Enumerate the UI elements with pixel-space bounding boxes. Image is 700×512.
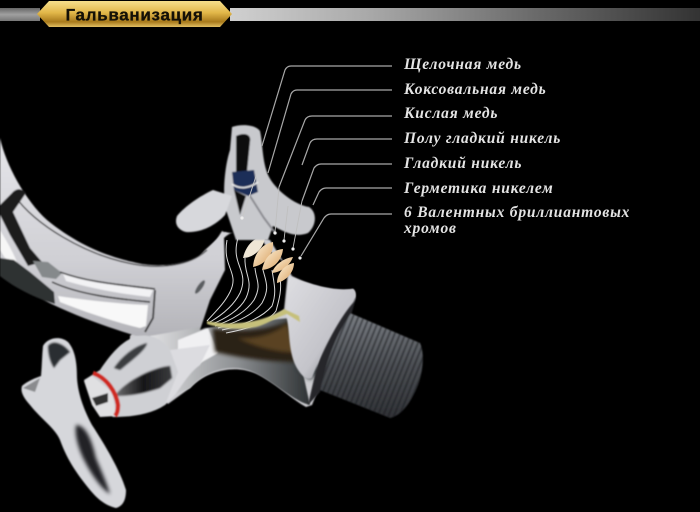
layer labels: Коксовальная медь bbox=[403, 81, 546, 98]
header badge bbox=[37, 1, 232, 27]
layer labels: Гладкий никель bbox=[403, 155, 522, 172]
cutaway layers bbox=[200, 230, 300, 333]
upper handle bbox=[176, 125, 315, 240]
main body silhouette bbox=[130, 232, 356, 407]
faucet illustration bbox=[0, 125, 423, 508]
collar bbox=[286, 276, 356, 379]
layer labels: Герметика никелем bbox=[403, 180, 554, 197]
red ring bbox=[93, 373, 118, 416]
spout bbox=[0, 138, 240, 345]
threaded connector bbox=[308, 298, 423, 418]
header bar bbox=[0, 1, 700, 27]
layer lines bbox=[207, 238, 281, 333]
layer labels: Щелочная медь bbox=[403, 56, 522, 73]
layer labels: Полу гладкий никель bbox=[403, 130, 561, 147]
layer labels: Кислая медь bbox=[403, 105, 498, 122]
header badge: Гальванизация bbox=[65, 6, 204, 24]
copper and nickel leaves bbox=[243, 237, 294, 283]
layer labels: хромов bbox=[403, 220, 457, 237]
lower handle cone bbox=[84, 336, 210, 417]
lower handle lever bbox=[21, 338, 126, 508]
yellow layer bbox=[207, 309, 300, 329]
callout dots bbox=[240, 216, 302, 260]
layer labels: 6 Валентных бриллиантовых bbox=[404, 204, 630, 221]
callout leader lines bbox=[243, 66, 392, 256]
layer labels bbox=[403, 56, 630, 237]
body lower part bbox=[150, 318, 320, 405]
